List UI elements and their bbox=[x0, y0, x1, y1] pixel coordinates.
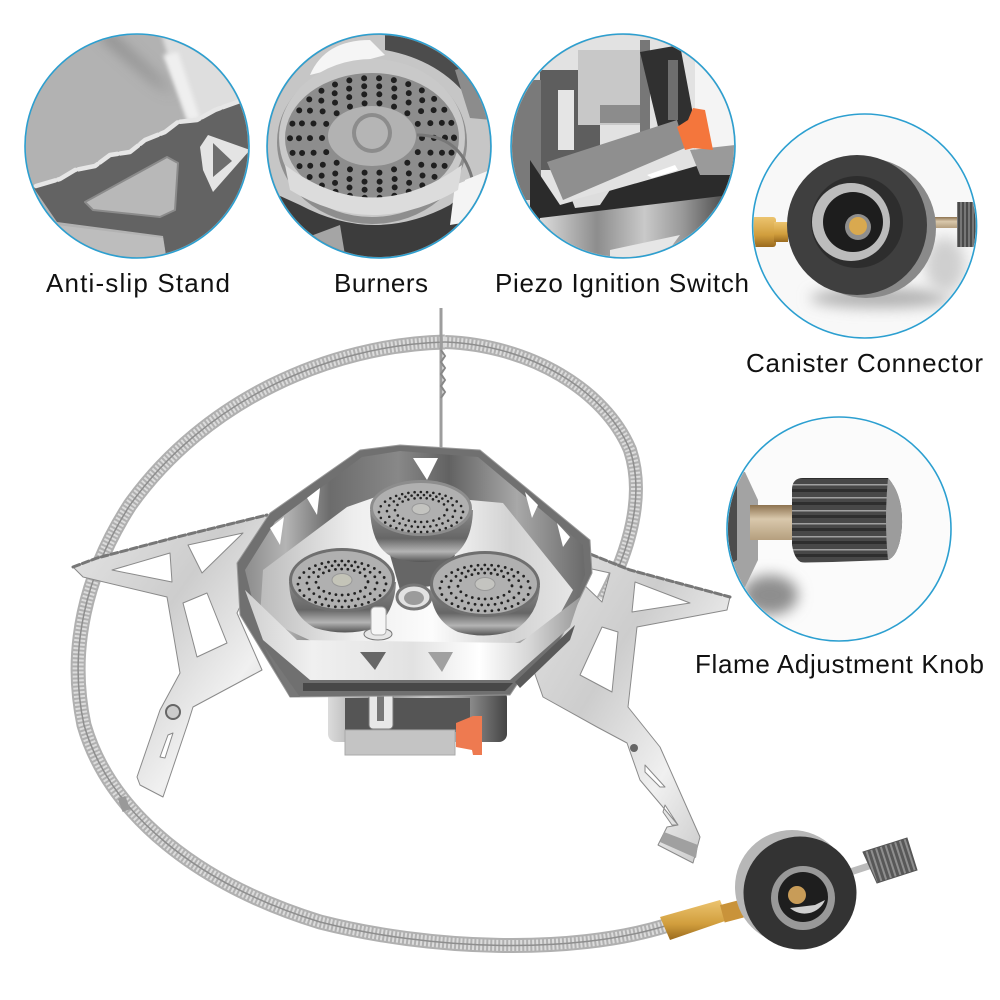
heading: Burners: Burners bbox=[334, 268, 428, 298]
heading: Piezo Ignition Switch: Piezo Ignition Switch bbox=[495, 268, 749, 298]
left pot support arm and leg bbox=[73, 515, 275, 812]
heading: Flame Adjustment Knob: Flame Adjustment Knob bbox=[695, 649, 984, 679]
panel: flame adjustment knob detail bbox=[727, 417, 951, 641]
heading: Anti-slip Stand: Anti-slip Stand bbox=[46, 268, 230, 298]
burner: right bbox=[430, 551, 540, 636]
right pot support arm and leg bbox=[530, 530, 730, 863]
burner: top bbox=[370, 480, 473, 562]
panel: piezo ignition switch detail bbox=[511, 34, 740, 262]
burner holes bbox=[290, 78, 454, 198]
braided gas hose bbox=[78, 342, 665, 946]
panel: burners detail bbox=[267, 34, 491, 260]
tray windows bbox=[270, 458, 570, 547]
heading: Canister Connector: Canister Connector bbox=[746, 348, 983, 378]
panel: canister connector detail bbox=[752, 114, 978, 338]
canister connector assembly bbox=[660, 830, 917, 950]
wind shield antenna bbox=[440, 308, 445, 448]
panel: anti-slip stand detail bbox=[25, 30, 260, 262]
igniter bbox=[364, 607, 392, 640]
centre cup bbox=[397, 585, 431, 609]
piezo ignition block bbox=[328, 683, 507, 755]
orange ignition switch bbox=[456, 716, 482, 755]
stand blade with teeth bbox=[33, 100, 255, 262]
stove windshield tray bbox=[237, 445, 592, 697]
burner: left bbox=[289, 548, 396, 632]
metal clip bbox=[369, 683, 393, 729]
dark centre floor bbox=[390, 555, 455, 590]
